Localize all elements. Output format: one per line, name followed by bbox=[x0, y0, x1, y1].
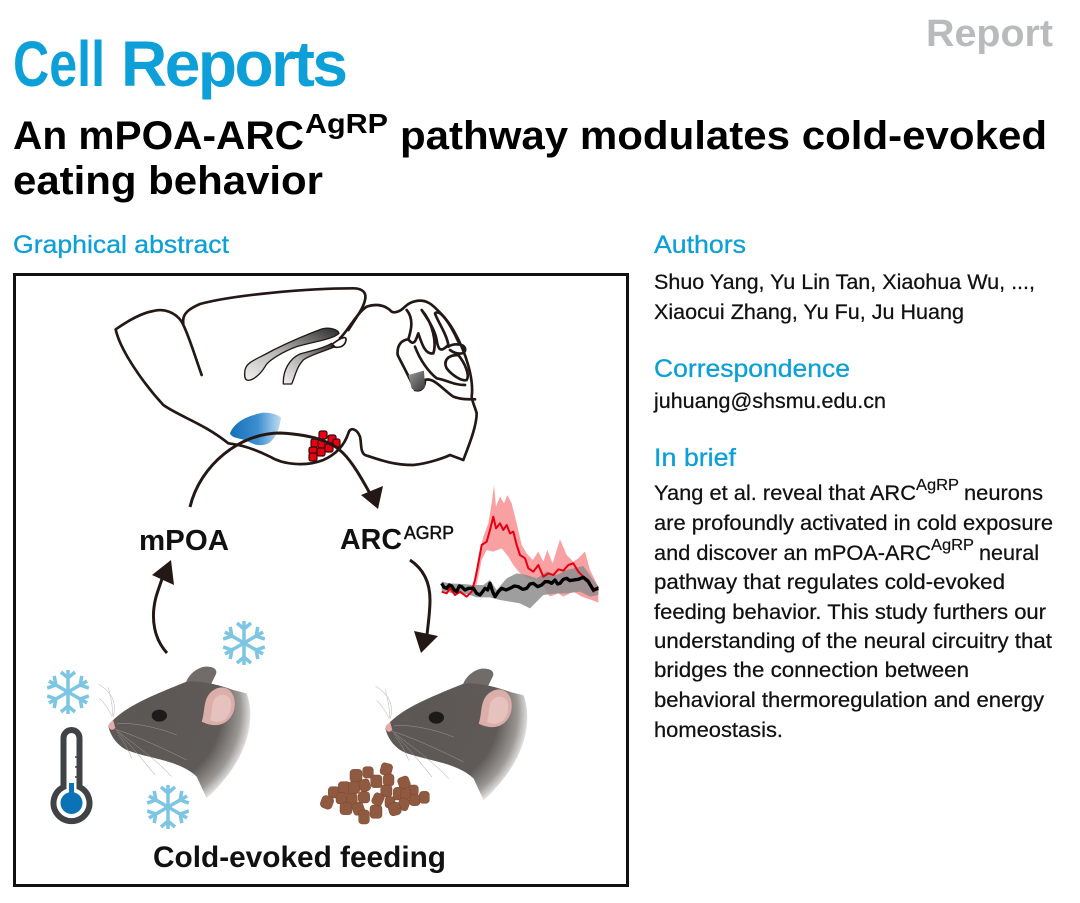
article type label: Report: Report bbox=[926, 13, 1053, 55]
caption: Cold-evoked feeding: Cold-evoked feeding bbox=[153, 841, 446, 874]
panel frame bbox=[14, 274, 628, 886]
red trace error band bbox=[473, 485, 598, 603]
control trace bbox=[442, 577, 598, 597]
journal name: Cell Reports bbox=[13, 28, 348, 100]
ARC AgRP neuron cluster bbox=[309, 431, 340, 461]
summary paragraph: understanding of the neural circuitry that bbox=[654, 630, 1052, 653]
mouse in the cold bbox=[98, 667, 250, 798]
photometry trace chart bbox=[442, 485, 598, 608]
arrow: mPOA to ARC over the brain bbox=[190, 433, 383, 509]
cerebellum folds bbox=[398, 310, 475, 399]
summary paragraph: feeding behavior. This study furthers our bbox=[654, 601, 1046, 624]
food pellets bbox=[319, 762, 429, 824]
lateral ventricle bbox=[245, 328, 339, 380]
icon: snowflake top bbox=[221, 621, 267, 665]
article title: An mPOA-ARC bbox=[13, 114, 304, 158]
icon: snowflake bottom bbox=[145, 785, 191, 829]
heading: Correspondence: Correspondence bbox=[654, 355, 850, 383]
arrow: ARC to feeding mouse bbox=[410, 560, 438, 653]
brain outline bbox=[116, 301, 477, 465]
summary paragraph: AgRP bbox=[916, 477, 959, 494]
summary paragraph: AgRP bbox=[931, 537, 974, 554]
summary paragraph: Yang et al. reveal that ARC bbox=[654, 482, 916, 505]
summary paragraph: behavioral thermoregulation and energy bbox=[654, 689, 1045, 712]
journal name: Cell Reports: Cell bbox=[13, 28, 105, 100]
article title: eating behavior bbox=[13, 159, 323, 203]
icon: thermometer bbox=[54, 730, 90, 821]
summary paragraph: neurons bbox=[964, 482, 1043, 505]
summary paragraph: and discover an mPOA-ARC bbox=[654, 542, 931, 565]
author names: Shuo Yang, Yu Lin Tan, Xiaohua Wu, ..., bbox=[654, 271, 1035, 294]
mouse feeding bbox=[375, 669, 527, 800]
summary paragraph: bridges the connection between bbox=[654, 659, 969, 682]
panel: graphical abstract bbox=[14, 274, 628, 886]
email address: juhuang@shsmu.edu.cn bbox=[653, 390, 886, 413]
article title bbox=[13, 108, 1047, 203]
author names bbox=[654, 271, 1035, 324]
article title: AgRP bbox=[305, 108, 388, 139]
red trace bbox=[442, 517, 598, 597]
brain section diagram bbox=[116, 288, 477, 465]
block: in brief bbox=[654, 444, 1053, 742]
summary paragraph: neural bbox=[979, 542, 1039, 565]
summary paragraph: homeostasis. bbox=[654, 719, 783, 742]
block: authors bbox=[654, 231, 1035, 324]
article title: pathway modulates cold-evoked bbox=[400, 114, 1047, 158]
label: ARC AGRP: ARC bbox=[340, 524, 402, 556]
block: correspondence bbox=[653, 355, 886, 413]
arrow: cold mouse to mPOA bbox=[152, 560, 174, 653]
heading: In brief: In brief bbox=[654, 444, 736, 472]
mPOA region bbox=[230, 413, 281, 445]
heading: Graphical abstract: Graphical abstract bbox=[13, 231, 229, 259]
summary paragraph: are profoundly activated in cold exposure bbox=[654, 512, 1053, 535]
journal name: Cell Reports: Reports bbox=[121, 28, 348, 100]
author names: Xiaocui Zhang, Yu Fu, Ju Huang bbox=[654, 301, 964, 324]
summary paragraph: pathway that regulates cold-evoked bbox=[654, 571, 1005, 594]
label: mPOA: mPOA bbox=[139, 525, 229, 557]
heading: Authors: Authors bbox=[654, 231, 746, 259]
control trace error band bbox=[442, 566, 598, 608]
label: ARC AGRP bbox=[340, 523, 454, 556]
icon: snowflake left bbox=[45, 670, 91, 714]
summary paragraph bbox=[654, 477, 1053, 742]
label: ARC AGRP: AGRP bbox=[404, 523, 454, 543]
